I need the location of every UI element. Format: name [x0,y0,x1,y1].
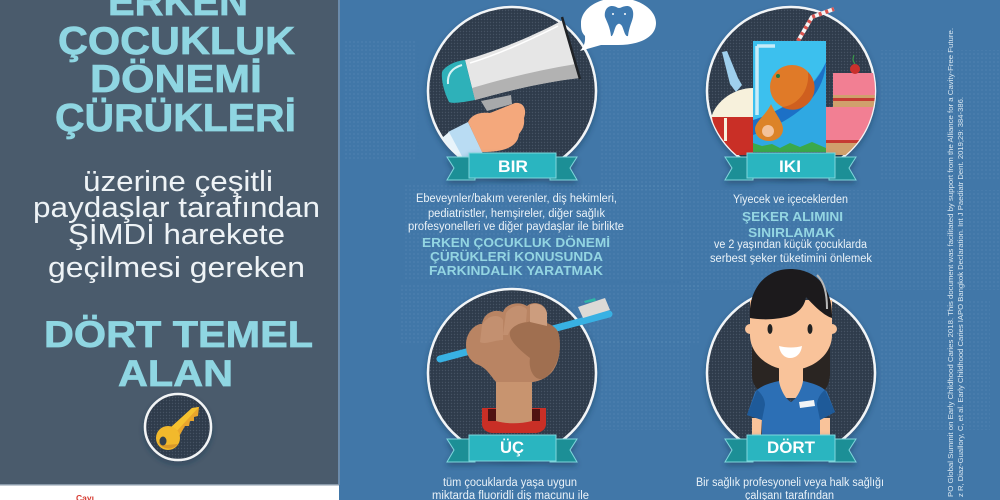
icon: fist with toothbrush in circle [428,289,610,457]
text block: subtitle: üzerine çeşitli [83,166,273,198]
icon: sugary food and drink in circle [707,7,876,175]
text block: step two description: ve 2 yaşından küçük çocuklarda [714,239,868,251]
panel: left title column [0,0,340,500]
icon: gold key [145,394,211,460]
text block: step one description [408,193,624,278]
text block: step one description: FARKINDALIK YARATMAK [429,264,603,278]
text block: step two description: SINIRLAMAK [748,226,835,240]
text block: vertical references: PO Global Summit on Early Childhood Caries 2018. This document was facilitated by support from the Alliance for a Cavity-Free Future. [948,28,955,497]
icon: speech bubble with tooth [580,0,656,51]
text block: step four description [696,477,884,500]
icon: megaphone in circle [428,0,656,175]
panel: step three [428,289,610,500]
heading: main title: ÇOCUKLUK [58,20,295,63]
text block: step one description: Ebeveynler/bakım verenler, diş hekimleri, [416,193,617,205]
text block: step one description: profesyonelleri ve diğer paydaşlar ile birlikte [408,221,624,233]
heading: four key areas: DÖRT TEMEL [44,314,313,355]
text block: subtitle: paydaşlar tarafından [33,192,320,224]
text block: subtitle: ŞİMDİ harekete [68,218,285,251]
ribbon: IKI: IKI [779,157,801,176]
text block: vertical references: z R, Diaz-Guallory, C, et al. Early Childhood Caries IAPO Bangkok Declaration. Int J Paediatr Dent. 2019;29: 384-386. [958,97,965,497]
text block: subtitle [33,166,320,284]
text block: step two description: Yiyecek ve içeceklerden [733,194,848,206]
text block: step one description: ERKEN ÇOCUKLUK DÖNEMİ [422,235,610,250]
heading: main title: DÖNEMİ [90,58,262,101]
ribbon: DÖRT [725,435,856,462]
icon: health professional in circle [707,269,875,457]
panel: step one [408,0,656,278]
ribbon: BIR [447,153,577,180]
text block: step three description: tüm çocuklarda yaşa uygun [443,477,577,489]
heading: main title: ÇÜRÜKLERİ [55,97,296,140]
panel: step four [696,269,884,500]
heading: four key areas: ALAN [118,353,233,394]
panel: step two [707,7,876,265]
text block: step four description: Bir sağlık profesyoneli veya halk sağlığı [696,477,884,489]
text block: step two description [710,194,872,265]
ribbon: DÖRT: DÖRT [767,438,816,457]
heading: main title [55,0,296,140]
text block: subtitle: geçilmesi gereken [48,252,305,284]
ribbon: ÜÇ: ÜÇ [500,438,524,457]
ribbon: IKI [725,153,856,180]
heading: four key areas [44,314,313,394]
text block: step two description: serbest şeker tüketimini önlemek [710,253,872,265]
ribbon: BIR: BIR [498,157,528,176]
text block: step one description: pediatristler, hemşireler, diğer sağlık [428,208,605,220]
text block: step one description: ÇÜRÜKLERİ KONUSUNDA [430,249,603,264]
panel: blue background [339,0,1000,500]
text block: step three description [432,477,589,500]
text block: step two description: ŞEKER ALIMINI [742,210,843,224]
ribbon: ÜÇ [447,435,577,462]
text block: vertical references [948,28,965,497]
